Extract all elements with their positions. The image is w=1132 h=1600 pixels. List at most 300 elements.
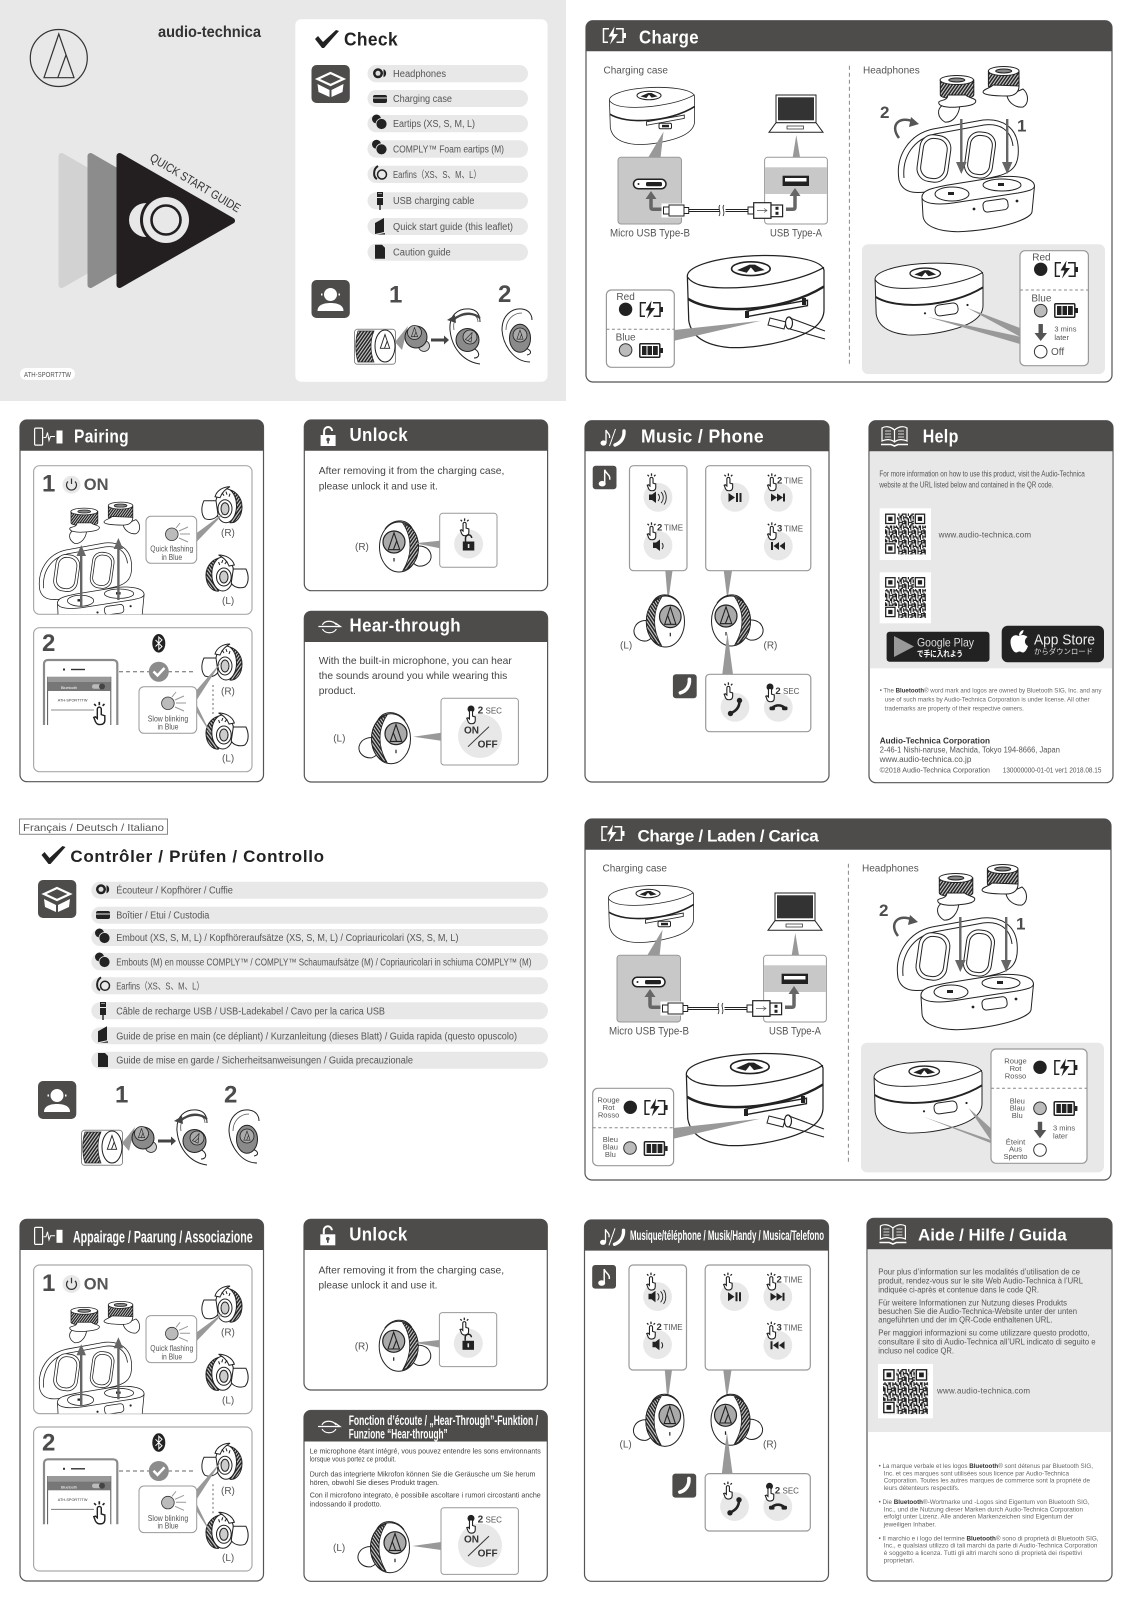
- step numbers: 1: [1016, 914, 1025, 934]
- cover panel: [0, 0, 566, 401]
- model pill: ATH-SPORT7TW: [24, 370, 72, 379]
- press counts: TIME: [784, 524, 803, 533]
- website url: www.audio-technica.com: [938, 531, 1031, 540]
- press counts: [656, 1275, 803, 1496]
- step 1 box: 1: [42, 471, 55, 498]
- press counts: SEC: [782, 1486, 799, 1495]
- callout: quick flashing: [146, 1316, 197, 1363]
- on off box: OFF: [478, 1549, 498, 1560]
- press counts: 3: [777, 523, 782, 534]
- step numbers: 1: [389, 282, 402, 309]
- aide text: Per maggiori informazioni su come utilizzare questo prodotto,: [878, 1329, 1090, 1338]
- on off box: OFF: [478, 739, 498, 750]
- callout: headphones status: Red: [1032, 253, 1051, 264]
- status panel background: [862, 244, 1105, 374]
- fonction text: Le microphone étant intégré, vous pouvez entendre les sons environnants: [310, 1446, 541, 1455]
- control boxes: [630, 466, 811, 732]
- labels: L R: (R): [763, 1440, 777, 1451]
- phone screen text: ATH-SPORT7TW: [58, 699, 88, 703]
- trademark notes: Inc., e qualsiasi utilizzo di tali marchi da parte di Audio-Technica Corporation: [884, 1543, 1098, 1550]
- labels: R L: (L): [222, 754, 234, 765]
- press counts: TIME: [784, 1276, 803, 1285]
- press counts: 3: [776, 1323, 782, 1334]
- callout: quick flashing: Quick flashing: [150, 545, 193, 554]
- play triangles graphic: [62, 156, 232, 285]
- step numbers: 2: [498, 281, 511, 308]
- labels: connectors: USB Type-A: [770, 228, 823, 240]
- badge: google play: Google Play: [917, 636, 974, 650]
- hear-through text: [319, 655, 512, 697]
- press counts: 2: [775, 1485, 780, 1496]
- unlock text: [319, 465, 504, 492]
- icon: phone: [672, 1474, 696, 1498]
- icon: person: [38, 1081, 76, 1119]
- case status illustration: [874, 1061, 982, 1133]
- header: musique: Musique/téléphone / Musik/Handy / Musica/Telefono: [630, 1227, 824, 1243]
- press counts: 2: [657, 523, 662, 534]
- music controls: [634, 473, 793, 722]
- pointers: [923, 1108, 991, 1143]
- contents list: Headphones: [393, 69, 446, 80]
- header: fonction d'ecoute: [304, 1410, 547, 1442]
- callout: case charge status: Rouge: [597, 1096, 620, 1105]
- grey band: [868, 1249, 1111, 1432]
- callout: case charge status: Rot: [603, 1103, 615, 1112]
- press counts: TIME: [784, 1324, 803, 1333]
- QR code: [878, 1364, 933, 1418]
- step 1 box: ON: [84, 476, 109, 494]
- fonction text: [310, 1446, 541, 1508]
- trademark notes: leurs détenteurs respectifs.: [884, 1485, 960, 1492]
- header: aide: [867, 1218, 1112, 1249]
- aide text: incluso nel codice QR.: [878, 1346, 954, 1355]
- hear-through text: With the built-in microphone, you can hear: [319, 655, 512, 667]
- header: appairage: [20, 1219, 264, 1250]
- contents list: Écouteur / Kopfhörer / Cuffie: [116, 884, 233, 897]
- callout: headphones status: Blu: [1012, 1111, 1023, 1120]
- company address: www.audio-technica.co.jp: [879, 755, 972, 764]
- divider: [847, 864, 849, 1165]
- fonction text: lorsque vous portez ce produit.: [310, 1455, 396, 1464]
- label: L: (L): [333, 1543, 345, 1554]
- callout: headphones status: Off: [1051, 347, 1064, 358]
- step 2 box: [34, 628, 252, 772]
- company address: 130000000-01-01 ver1 2018.08.15: [1003, 767, 1101, 774]
- header: music phone: [585, 421, 829, 451]
- labels: sections: Charging case: [604, 66, 668, 76]
- brand name: audio-technica: [158, 24, 261, 41]
- callout: case charge status: Blue: [616, 333, 636, 344]
- unlock text: please unlock it and use it.: [318, 1280, 437, 1292]
- label: R: (R): [355, 542, 369, 553]
- icon: music: [593, 466, 616, 489]
- step 1 box: 1: [42, 1270, 55, 1297]
- aide text: angeführten und der im QR-Code enthaltenen URL.: [878, 1316, 1053, 1325]
- contents list: [368, 65, 528, 261]
- step numbers: 2: [880, 103, 889, 122]
- step 1 box: ON: [84, 1275, 109, 1293]
- callout: case charge status: [593, 1088, 674, 1166]
- earbud illustration: [359, 713, 410, 764]
- charging illustrations: [609, 66, 1034, 348]
- on off box: ON: [464, 1535, 479, 1546]
- callout: headphones status: 3 mins: [1054, 325, 1077, 334]
- callout: case charge status: Red: [616, 292, 635, 303]
- help text: For more information on how to use this product, visit the Audio-Technica: [879, 470, 1085, 479]
- labels: L R: [620, 1440, 777, 1451]
- fonction text: hören, obwohl Sie dieses Produkt tragen.: [310, 1478, 439, 1487]
- panel: charge: [586, 21, 1112, 382]
- press counts: 2: [656, 1322, 662, 1333]
- charging illustrations: [608, 864, 1034, 1146]
- callout: headphones status: Aus: [1009, 1145, 1022, 1154]
- contents list: Eartips (XS, S, M, L): [393, 119, 475, 130]
- on off box: SEC: [486, 1516, 502, 1525]
- badge: app store: [1002, 626, 1104, 662]
- checkmark: [315, 30, 339, 48]
- labels: R L: (R): [221, 528, 235, 539]
- contents list: Earfins（XS、S、M、L）: [116, 980, 204, 992]
- step 2 box: [34, 1427, 252, 1571]
- contents list: Guide de mise en garde / Sicherheitsanweisungen / Guida precauzionale: [116, 1056, 413, 1067]
- pointer: [412, 1542, 441, 1550]
- step 2 illustration: [44, 634, 248, 749]
- on off box: [441, 1508, 518, 1574]
- callout: headphones status: Rot: [1010, 1064, 1022, 1073]
- contents list: Embouts (M) en mousse COMPLY™ / COMPLY™ Schaumaufsätze (M) / Copriauricolari in schiuma COMPLY™ (M): [116, 958, 531, 968]
- labels: R L: (L): [222, 1553, 234, 1564]
- fonction text: indossando il prodotto.: [310, 1499, 382, 1508]
- language tag: Français / Deutsch / Italiano: [23, 822, 164, 834]
- company address: 2-46-1 Nishi-naruse, Machida, Tokyo 194-8666, Japan: [880, 746, 1060, 755]
- callout: slow blinking: Slow blinking: [148, 1514, 188, 1523]
- header: unlock: [304, 1219, 547, 1250]
- labels: connectors: USB Type-A: [769, 1026, 822, 1038]
- callout: headphones status: Blue: [1031, 294, 1052, 305]
- labels: sections: Charging case: [602, 864, 667, 874]
- step numbers: 2: [879, 901, 888, 920]
- website url: www.audio-technica.com: [936, 1386, 1030, 1395]
- header: unlock: Unlock: [350, 425, 409, 445]
- unlock text: please unlock it and use it.: [319, 480, 438, 492]
- labels: sections: [604, 66, 920, 76]
- press counts: TIME: [664, 1323, 683, 1332]
- header: fonction d'ecoute: Fonction d’écoute / „Hear-Through”-Funktion /: [349, 1412, 538, 1428]
- callout: slow blinking: in Blue: [158, 1522, 179, 1531]
- step 1 illustration: [39, 487, 248, 630]
- unlock text: [318, 1264, 504, 1292]
- step 2 illustration: [44, 1433, 248, 1548]
- badge: google play: [887, 632, 990, 662]
- trademark notes: proprietari.: [884, 1558, 915, 1565]
- label: L: (L): [333, 734, 345, 745]
- aide text: besuchen Sie die Audio-Technica-Website unter der unten: [878, 1307, 1077, 1316]
- trademark notes: • La marque verbale et les logos Bluetooth® sont détenus par Bluetooth SIG,: [879, 1462, 1093, 1470]
- trademark note: use of such marks by Audio-Technica Corporation is under license. All other: [885, 697, 1090, 704]
- step numbers: [115, 1082, 237, 1109]
- trademark note: • The Bluetooth® word mark and logos are owned by Bluetooth SIG, Inc. and any: [880, 687, 1102, 695]
- labels: R L: (L): [222, 596, 234, 607]
- callout: headphones status: later: [1053, 1131, 1068, 1140]
- hear-through text: product.: [319, 685, 356, 697]
- panel: unlock: [304, 420, 548, 591]
- press counts: 2: [777, 475, 782, 486]
- callout: case charge status: Rosso: [598, 1110, 619, 1119]
- step 2 box: 2: [42, 1429, 55, 1456]
- hear-through text: the sounds around you while wearing this: [319, 670, 507, 682]
- icon: box contents: [312, 65, 350, 103]
- contents list: Charging case: [393, 94, 452, 105]
- press counts: 2: [776, 1275, 782, 1286]
- QR code 2: [880, 572, 931, 623]
- unlock text: After removing it from the charging case,: [319, 465, 504, 477]
- panel: check: [295, 19, 548, 382]
- trademark notes: erfolgt unter Lizenz. Alle anderen Markenzeichen sind Eigentum der: [884, 1514, 1074, 1521]
- divider: [848, 66, 850, 367]
- callout: case charge status: Bleu: [603, 1135, 618, 1144]
- step 1 illustration: [39, 1286, 248, 1429]
- labels: sections: [602, 864, 919, 874]
- labels: L R: (R): [764, 640, 777, 651]
- phone screen text: ATH-SPORT7TW: [58, 1498, 88, 1502]
- header: music phone: Music / Phone: [641, 426, 764, 446]
- labels: connectors: Micro USB Type-B: [610, 228, 690, 240]
- callout: headphones status: Rosso: [1005, 1072, 1026, 1081]
- callout: case charge status: Blu: [605, 1150, 616, 1159]
- callout: quick flashing: in Blue: [162, 553, 183, 562]
- phone screen text: Bluetooth: [61, 686, 77, 690]
- logo mark: [30, 30, 87, 86]
- on off box: ON: [464, 725, 479, 736]
- callout: slow blinking: [139, 687, 197, 733]
- trademark notes: Inc., und die Nutzung dieser Marken durch Audio-Technica Corporation: [884, 1506, 1083, 1513]
- badge: app store: App Store: [1034, 631, 1095, 648]
- callout: headphones status: [991, 1049, 1087, 1163]
- step numbers: [880, 103, 1026, 136]
- earbud emblem: [129, 194, 192, 246]
- labels: connectors: [609, 1026, 822, 1038]
- grey band: [870, 451, 1112, 668]
- press counts: 2: [775, 686, 781, 697]
- header: help: Help: [923, 427, 959, 447]
- trademark note: trademarks are property of their respective owners.: [885, 705, 1024, 712]
- press counts: TIME: [784, 476, 803, 485]
- fonction text: Durch das integrierte Mikrofon können Sie die Geräusche um Sie herum: [310, 1470, 535, 1479]
- labels: sections: Headphones: [862, 864, 919, 874]
- model pill: [20, 368, 75, 380]
- panel: music phone: [585, 421, 829, 782]
- QR code 1: [880, 508, 931, 560]
- labels: R L: (R): [221, 1327, 235, 1338]
- trademark notes: Corporation. Toutes les autres marques de commerce sont la propriété de: [884, 1478, 1090, 1485]
- trademark notes: è soggetto a licenza. Tutti gli altri marchi sono di proprietà dei rispettivi: [884, 1550, 1082, 1557]
- trademark notes: Inc. et ces marques sont utilisées sous licence par Audio-Technica: [884, 1470, 1069, 1477]
- unlock text: After removing it from the charging case,: [318, 1264, 504, 1276]
- contents list: [91, 882, 548, 1069]
- label: R: (R): [355, 1341, 369, 1352]
- status panel background: [861, 1043, 1104, 1172]
- panel: aide: [867, 1218, 1112, 1581]
- icon: music: [592, 1265, 616, 1289]
- aide text: [878, 1268, 1096, 1355]
- header: charge: [586, 21, 1112, 51]
- header: musique: [584, 1220, 828, 1251]
- contents list: Caution guide: [393, 248, 451, 258]
- panel: unlock second: [304, 1219, 547, 1390]
- callout: slow blinking: [139, 1486, 197, 1533]
- press counts: [657, 475, 803, 697]
- contents list: Guide de prise en main (ce dépliant) / Kurzanleitung (dieses Blatt) / Guida rapida (questo opuscolo): [116, 1032, 517, 1042]
- aide text: Für weitere Informationen zur Nutzung dieses Produkts: [878, 1298, 1067, 1307]
- step 2 box: 2: [42, 630, 55, 657]
- quick start guide label: QUICK START GUIDE: [147, 151, 243, 215]
- panel: help: [869, 421, 1113, 783]
- header: fonction d'ecoute: Funzione “Hear-through”: [349, 1425, 448, 1441]
- panel: musique: [584, 1220, 828, 1581]
- step numbers: [389, 281, 511, 309]
- on off box: 2: [478, 1515, 484, 1526]
- aide text: produit, rendez-vous sur le site Web Audio-Technica à l’URL: [878, 1276, 1084, 1285]
- trademark notes: • Die Bluetooth®-Wortmarke und -Logos sind Eigentum von Bluetooth SIG,: [879, 1498, 1090, 1506]
- callout: case charge status: [606, 290, 674, 367]
- contents list: Boîtier / Etui / Custodia: [116, 911, 210, 922]
- step numbers: 2: [224, 1082, 237, 1109]
- callout: headphones status: Blau: [1010, 1104, 1025, 1113]
- language tag: [20, 819, 168, 834]
- panel: hear-through: [304, 611, 548, 782]
- trademark notes: jeweiligen Inhaber.: [883, 1521, 936, 1528]
- wearing illustration: [354, 309, 532, 364]
- pointer: [413, 733, 441, 741]
- callout: headphones status: Éteint: [1006, 1137, 1026, 1146]
- unlock touch box: [440, 513, 497, 567]
- badge: app store: からダウンロード: [1034, 646, 1093, 656]
- earbud illustration: [379, 1320, 439, 1371]
- header: pairing: [20, 420, 264, 451]
- step 1 box: [34, 1265, 252, 1414]
- contents list: USB charging cable: [393, 196, 475, 207]
- labels: connectors: [610, 228, 823, 240]
- contents list: COMPLY™ Foam eartips (M): [393, 144, 504, 156]
- callout: headphones status: 3 mins: [1053, 1123, 1075, 1132]
- on off box: 2: [478, 705, 484, 716]
- callout: quick flashing: in Blue: [162, 1352, 183, 1361]
- contents list: Embout (XS, S, M, L) / Kopfhöreraufsätze (XS, S, M, L) / Copriauricolari (XS, S, M, L): [116, 933, 458, 944]
- music controls: [633, 1273, 792, 1521]
- header: charge: Charge: [639, 27, 699, 47]
- panel: appairage: [20, 1219, 264, 1581]
- badge: google play: で手に入れよう: [917, 649, 963, 659]
- callout: headphones status: later: [1054, 333, 1069, 342]
- callout: case charge status: Blau: [603, 1142, 618, 1151]
- control boxes: [629, 1265, 810, 1531]
- header: aide: Aide / Hilfe / Guida: [918, 1226, 1067, 1245]
- company address: [879, 736, 1101, 774]
- labels: L R: (L): [620, 1440, 632, 1451]
- heading: check: Check: [344, 30, 399, 50]
- header: appairage: Appairage / Paarung / Associazione: [73, 1228, 253, 1247]
- on off box: SEC: [486, 706, 502, 715]
- header: unlock: Unlock: [349, 1224, 408, 1244]
- press counts: SEC: [783, 687, 800, 696]
- company address: Audio-Technica Corporation: [880, 736, 990, 746]
- heading: controle: Contrôler / Prüfen / Controllo: [70, 847, 324, 866]
- callout: headphones status: Spento: [1003, 1152, 1028, 1161]
- header: charge laden carica: Charge / Laden / Carica: [638, 827, 819, 846]
- labels: R L: (R): [221, 1486, 235, 1497]
- contents list: Earfins（XS、S、M、L）: [393, 169, 481, 181]
- unlock touch box: [439, 1313, 497, 1367]
- step numbers: [879, 901, 1025, 934]
- step numbers: 1: [115, 1082, 128, 1109]
- labels: R L: [221, 528, 235, 607]
- contents list: Quick start guide (this leaflet): [393, 222, 513, 233]
- labels: L R: (L): [620, 640, 632, 651]
- labels: L R: [620, 640, 777, 651]
- aide text: Pour plus d’information sur les modalités d’utilisation de ce: [878, 1268, 1081, 1277]
- contents list: Câble de recharge USB / USB-Ladekabel / Cavo per la carica USB: [116, 1006, 385, 1018]
- phone screen text: [58, 686, 88, 703]
- callout: slow blinking: Slow blinking: [148, 715, 188, 724]
- header: help: [869, 421, 1113, 451]
- trademark notes: [879, 1462, 1099, 1565]
- earbud illustration: [358, 1522, 410, 1573]
- callout: quick flashing: [146, 516, 197, 563]
- step 1 box: [34, 466, 252, 614]
- header: charge laden carica: [585, 819, 1111, 850]
- labels: R L: (R): [221, 687, 235, 698]
- labels: R L: [221, 1486, 235, 1564]
- checkmark: [42, 846, 66, 864]
- labels: R L: (L): [222, 1395, 234, 1406]
- pointers: [927, 308, 1020, 344]
- icon: person: [312, 280, 350, 318]
- header: hear-through: [304, 611, 548, 642]
- callout: slow blinking: in Blue: [158, 722, 179, 731]
- earbud illustration: [380, 521, 440, 572]
- aide text: indiquée ci-après et contenue dans le code QR.: [878, 1285, 1039, 1294]
- header: unlock: [304, 420, 548, 451]
- aide text: consultare il sito di Audio-Technica all’URL indicato di seguito e: [878, 1337, 1096, 1346]
- labels: connectors: Micro USB Type-B: [609, 1026, 689, 1038]
- phone screen text: [58, 1485, 88, 1502]
- case status illustration: [875, 263, 983, 335]
- wearing illustration: [82, 1110, 259, 1165]
- company address: ©2018 Audio-Technica Corporation: [880, 766, 990, 774]
- panel: pairing: [20, 420, 264, 782]
- labels: R L: [221, 1327, 235, 1406]
- step numbers: 1: [1017, 116, 1026, 136]
- callout: quick flashing: Quick flashing: [150, 1344, 193, 1353]
- panel: charge laden carica: [585, 819, 1111, 1180]
- panel: check multilingual: [38, 846, 548, 1165]
- help text: [879, 470, 1085, 489]
- icon: box contents: [38, 880, 76, 918]
- header: pairing: Pairing: [74, 427, 129, 447]
- callout: headphones status: Rouge: [1004, 1057, 1027, 1066]
- press counts: TIME: [664, 524, 683, 533]
- icon: phone: [673, 674, 697, 698]
- on off box: [441, 698, 518, 765]
- panel: fonction d'ecoute: [304, 1410, 547, 1581]
- phone screen text: Bluetooth: [61, 1485, 77, 1489]
- labels: R L: [221, 687, 235, 765]
- help text: website at the URL listed below and contained in the QR code.: [879, 480, 1053, 489]
- trademark note: [880, 687, 1102, 712]
- fonction text: Con il microfono integrato, è possibile ascoltare i rumori circostanti anche: [310, 1491, 541, 1500]
- callout: headphones status: [1020, 251, 1088, 366]
- callout: headphones status: Bleu: [1010, 1096, 1025, 1105]
